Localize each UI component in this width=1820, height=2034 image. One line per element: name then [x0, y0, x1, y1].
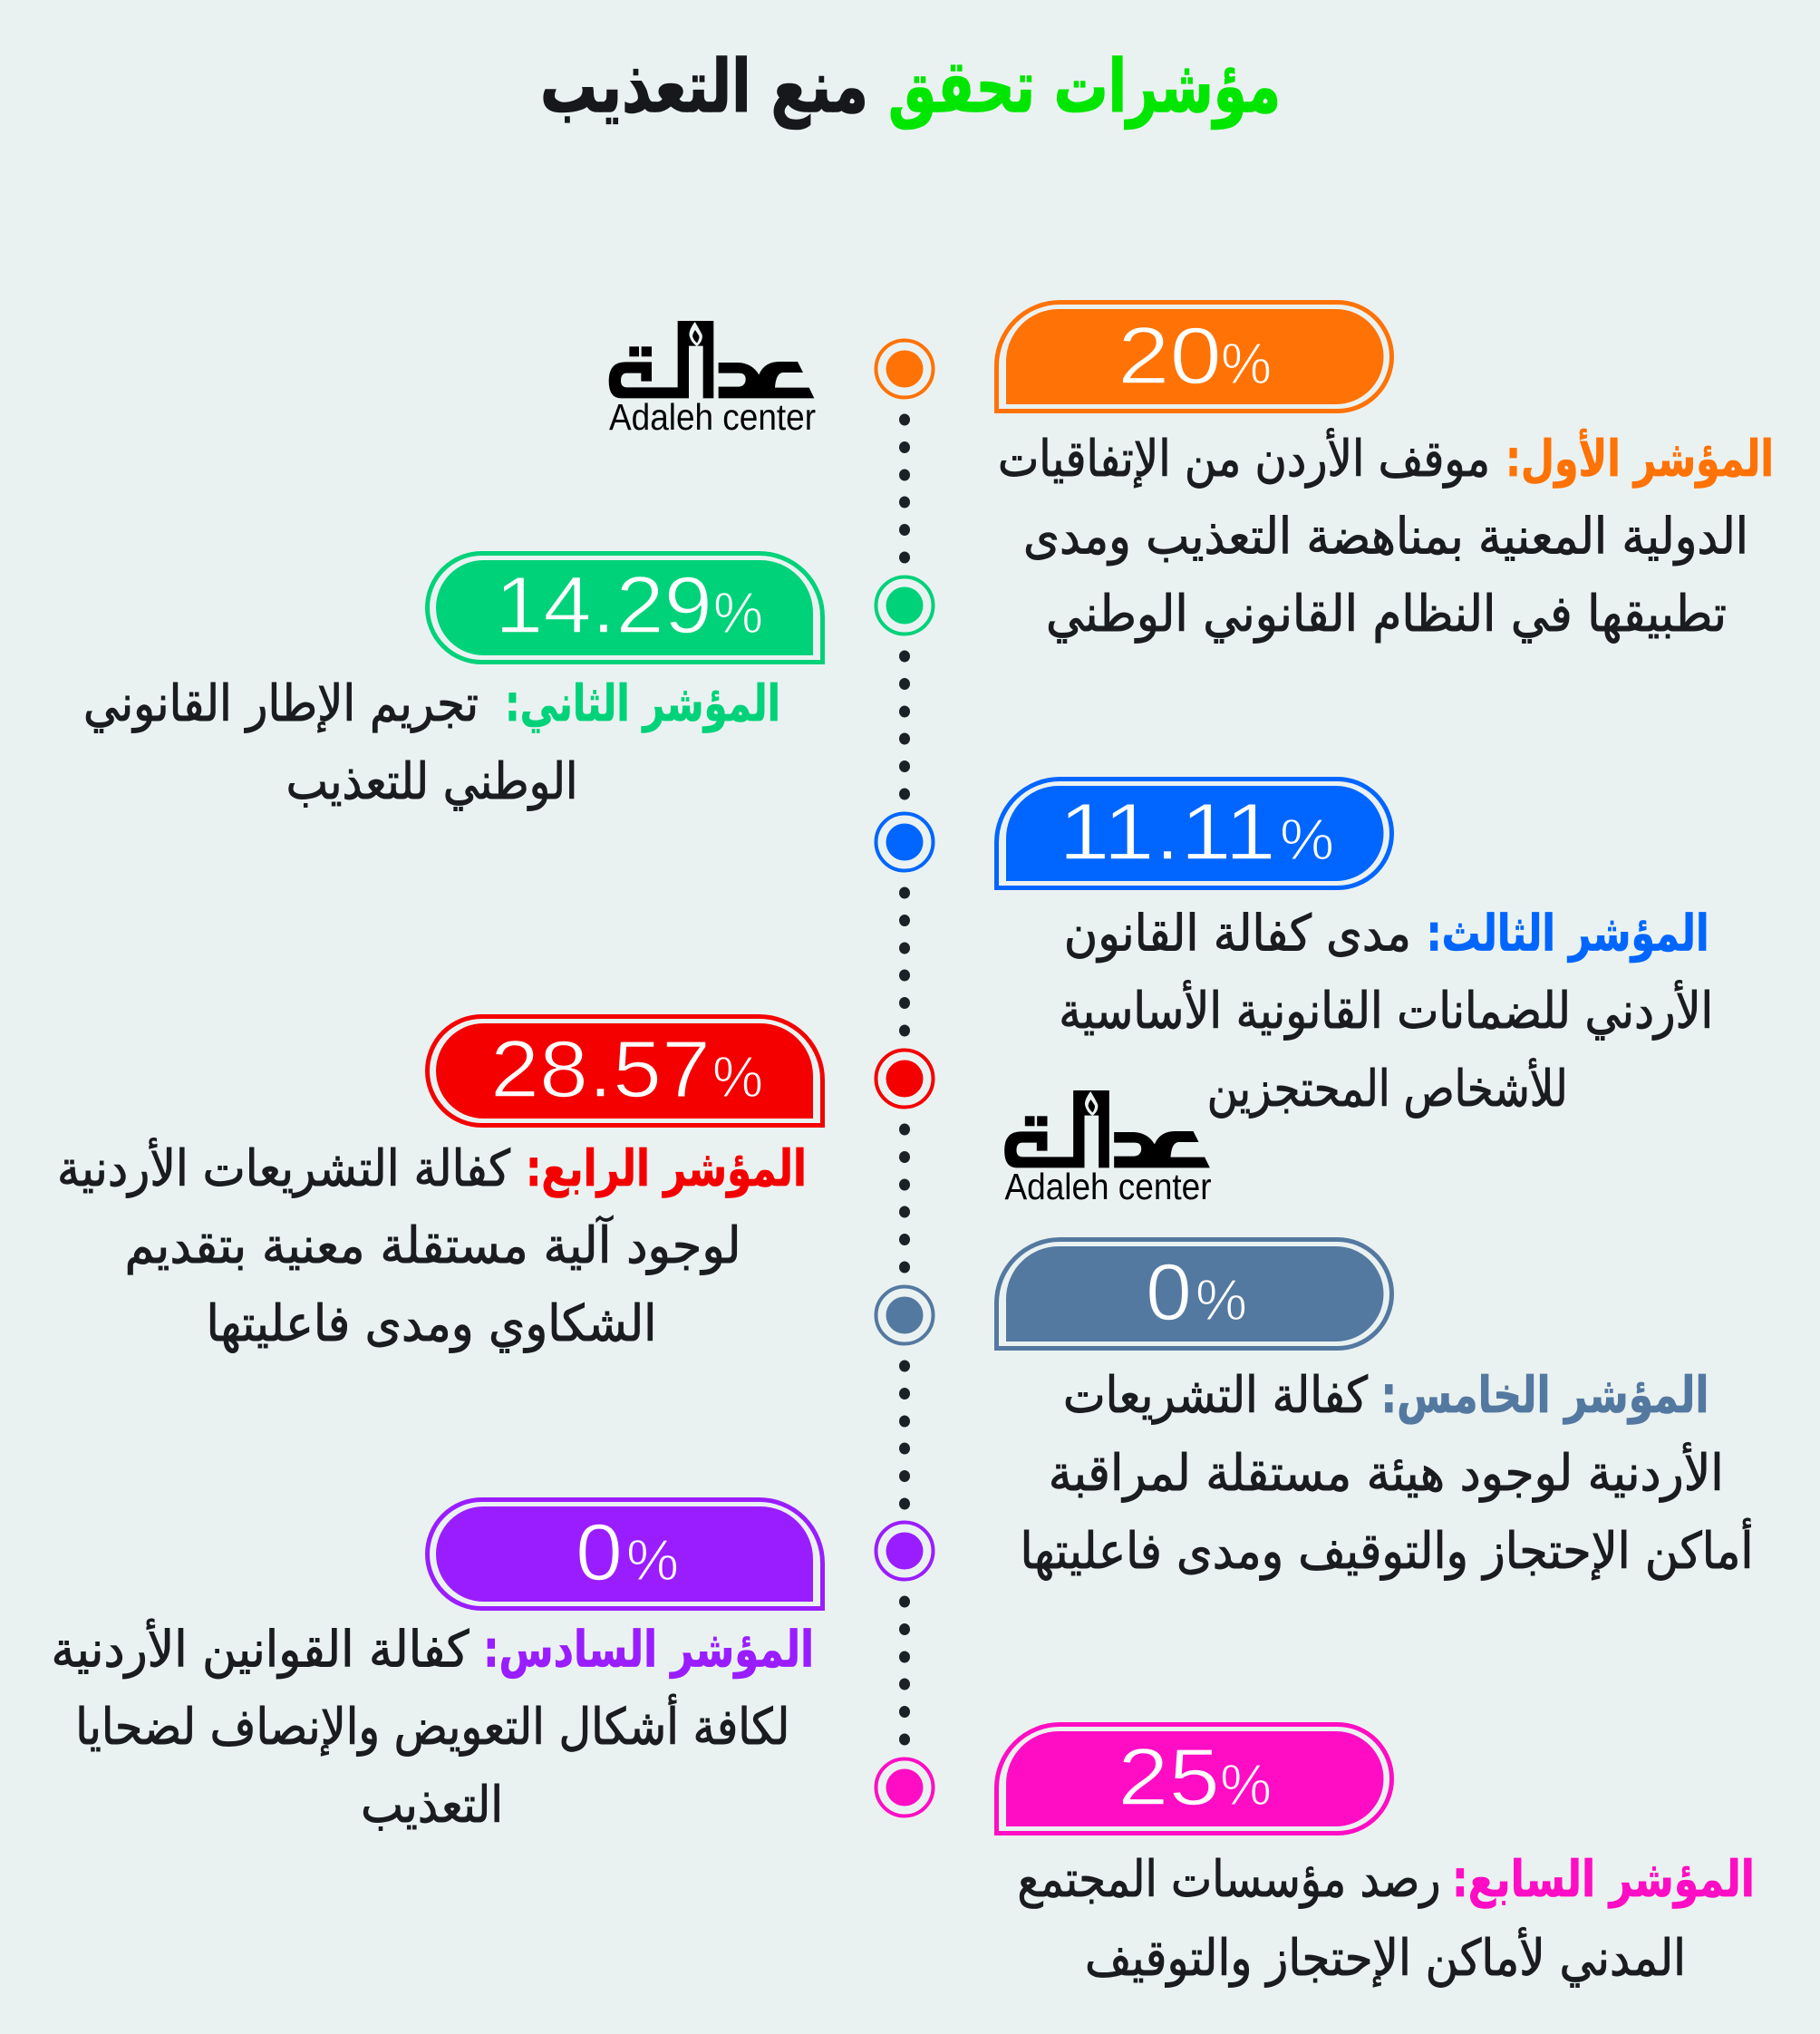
- marker: slate: [876, 1287, 934, 1343]
- text: indicator 2 description: تجريم الإطار القانوني: [83, 674, 479, 733]
- text: indicator 4 description: كفالة التشريعات الأردنية: [57, 1138, 511, 1197]
- badge: 25%: [997, 1724, 1392, 1833]
- text: indicator 4 description: [57, 1138, 807, 1353]
- marker: orange: [876, 341, 934, 397]
- panel: indicator 7: [997, 1724, 1755, 1988]
- panel: indicator 2: [83, 553, 823, 811]
- text: indicator 3 description: للأشخاص المحتجزين: [1207, 1058, 1568, 1119]
- marker: pink: [876, 1758, 934, 1816]
- text: indicator 1 description: الدولية المعنية بمناهضة التعذيب ومدى: [1023, 508, 1748, 566]
- text: indicator 3 description: مدى كفالة القانون: [1064, 905, 1411, 963]
- panel: indicator 5: [997, 1240, 1753, 1581]
- title: مؤشرات تحقق: [888, 44, 1281, 130]
- text: indicator 5 description: كفالة التشريعات: [1063, 1366, 1369, 1424]
- badge: 0%: 0: [1146, 1246, 1192, 1337]
- text: indicator 6 description: التعذيب: [361, 1776, 503, 1834]
- text: indicator 3 description: الأردني للضمانات القانونية الأساسية: [1059, 980, 1713, 1041]
- text: indicator 7 description: المؤشر السابع:: [1452, 1850, 1755, 1909]
- logo: Adaleh center (top): [609, 321, 816, 438]
- title: منع التعذيب: [540, 44, 868, 130]
- text: indicator 3 description: [1059, 905, 1713, 1119]
- badge: 11.11%: 11.11: [1059, 786, 1276, 877]
- badge: 20%: 20: [1118, 310, 1222, 401]
- panel: indicator 3: [997, 780, 1713, 1119]
- text: indicator 5 description: الأردنية لوجود هيئة مستقلة لمراقبة: [1049, 1442, 1724, 1502]
- text: indicator 2 description: الوطني للتعذيب: [286, 752, 578, 811]
- badge: 0%: %: [626, 1527, 679, 1593]
- text: indicator 5 description: أماكن الإحتجاز والتوقيف ومدى فاعليتها: [1021, 1518, 1753, 1581]
- badge: 11.11%: %: [1280, 807, 1334, 872]
- text: indicator 7 description: [1017, 1850, 1755, 1988]
- text: indicator 4 description: لوجود آلية مستقلة معنية بتقديم: [125, 1216, 741, 1274]
- text: indicator 6 description: [51, 1619, 814, 1834]
- badge: 28.57%: 28.57: [490, 1023, 711, 1114]
- badge: 11.11%: [997, 780, 1392, 888]
- text: indicator 7 description: المدني لأماكن الإحتجاز والتوقيف: [1085, 1927, 1686, 1988]
- text: indicator 4 description: المؤشر الرابع:: [526, 1139, 807, 1198]
- badge: 0%: %: [1196, 1267, 1247, 1332]
- panel: indicator 6: [51, 1499, 823, 1834]
- badge: 25%: %: [1220, 1752, 1272, 1817]
- text: indicator 1 description: [998, 428, 1774, 644]
- marker: purple: [876, 1523, 934, 1579]
- text: indicator 1 description: تطبيقها في النظام القانوني الوطني: [1046, 585, 1727, 644]
- badge: 20%: %: [1221, 331, 1272, 396]
- title: [540, 44, 1281, 130]
- badge: 0%: 0: [576, 1506, 623, 1597]
- text: indicator 2 description: [83, 674, 780, 811]
- badge: 14.29%: 14.29: [495, 559, 712, 650]
- text: indicator 6 description: لكافة أشكال التعويض والإنصاف لضحايا: [75, 1694, 789, 1757]
- text: indicator 6 description: كفالة القوانين الأردنية: [51, 1619, 470, 1679]
- text: indicator 4 description: الشكاوي ومدى فاعليتها: [207, 1294, 656, 1353]
- badge: 28.57%: %: [712, 1044, 763, 1109]
- badge: 25%: 25: [1118, 1731, 1220, 1822]
- text: indicator 3 description: المؤشر الثالث:: [1427, 905, 1709, 963]
- badge: 0%: [997, 1240, 1392, 1349]
- marker: red: [876, 1050, 934, 1108]
- panel: indicator 1: [997, 303, 1774, 644]
- marker: blue: [876, 814, 934, 870]
- text: indicator 7 description: رصد مؤسسات المجتمع: [1017, 1850, 1441, 1909]
- dotted connector line: [899, 413, 910, 1746]
- panel: indicator 4: [57, 1017, 823, 1353]
- logo: Adaleh center (middle): Adaleh center: [1004, 1166, 1211, 1207]
- badge: 28.57%: [428, 1017, 823, 1126]
- text: indicator 1 description: موقف الأردن من الإتفاقيات: [998, 428, 1490, 489]
- text: indicator 6 description: المؤشر السادس:: [483, 1621, 814, 1679]
- logo: Adaleh center (middle): [1004, 1090, 1211, 1207]
- badge: 0%: [428, 1499, 823, 1608]
- badge: 20%: [997, 303, 1392, 412]
- text: indicator 5 description: [1021, 1366, 1753, 1581]
- text: indicator 5 description: المؤشر الخامس:: [1381, 1366, 1709, 1425]
- timeline: [876, 341, 934, 1816]
- text: indicator 2 description: المؤشر الثاني:: [505, 674, 780, 733]
- marker: green: [876, 576, 934, 634]
- badge: 14.29%: %: [713, 580, 763, 645]
- logo: Adaleh center (top): Adaleh center: [609, 396, 816, 438]
- badge: 14.29%: [428, 553, 823, 662]
